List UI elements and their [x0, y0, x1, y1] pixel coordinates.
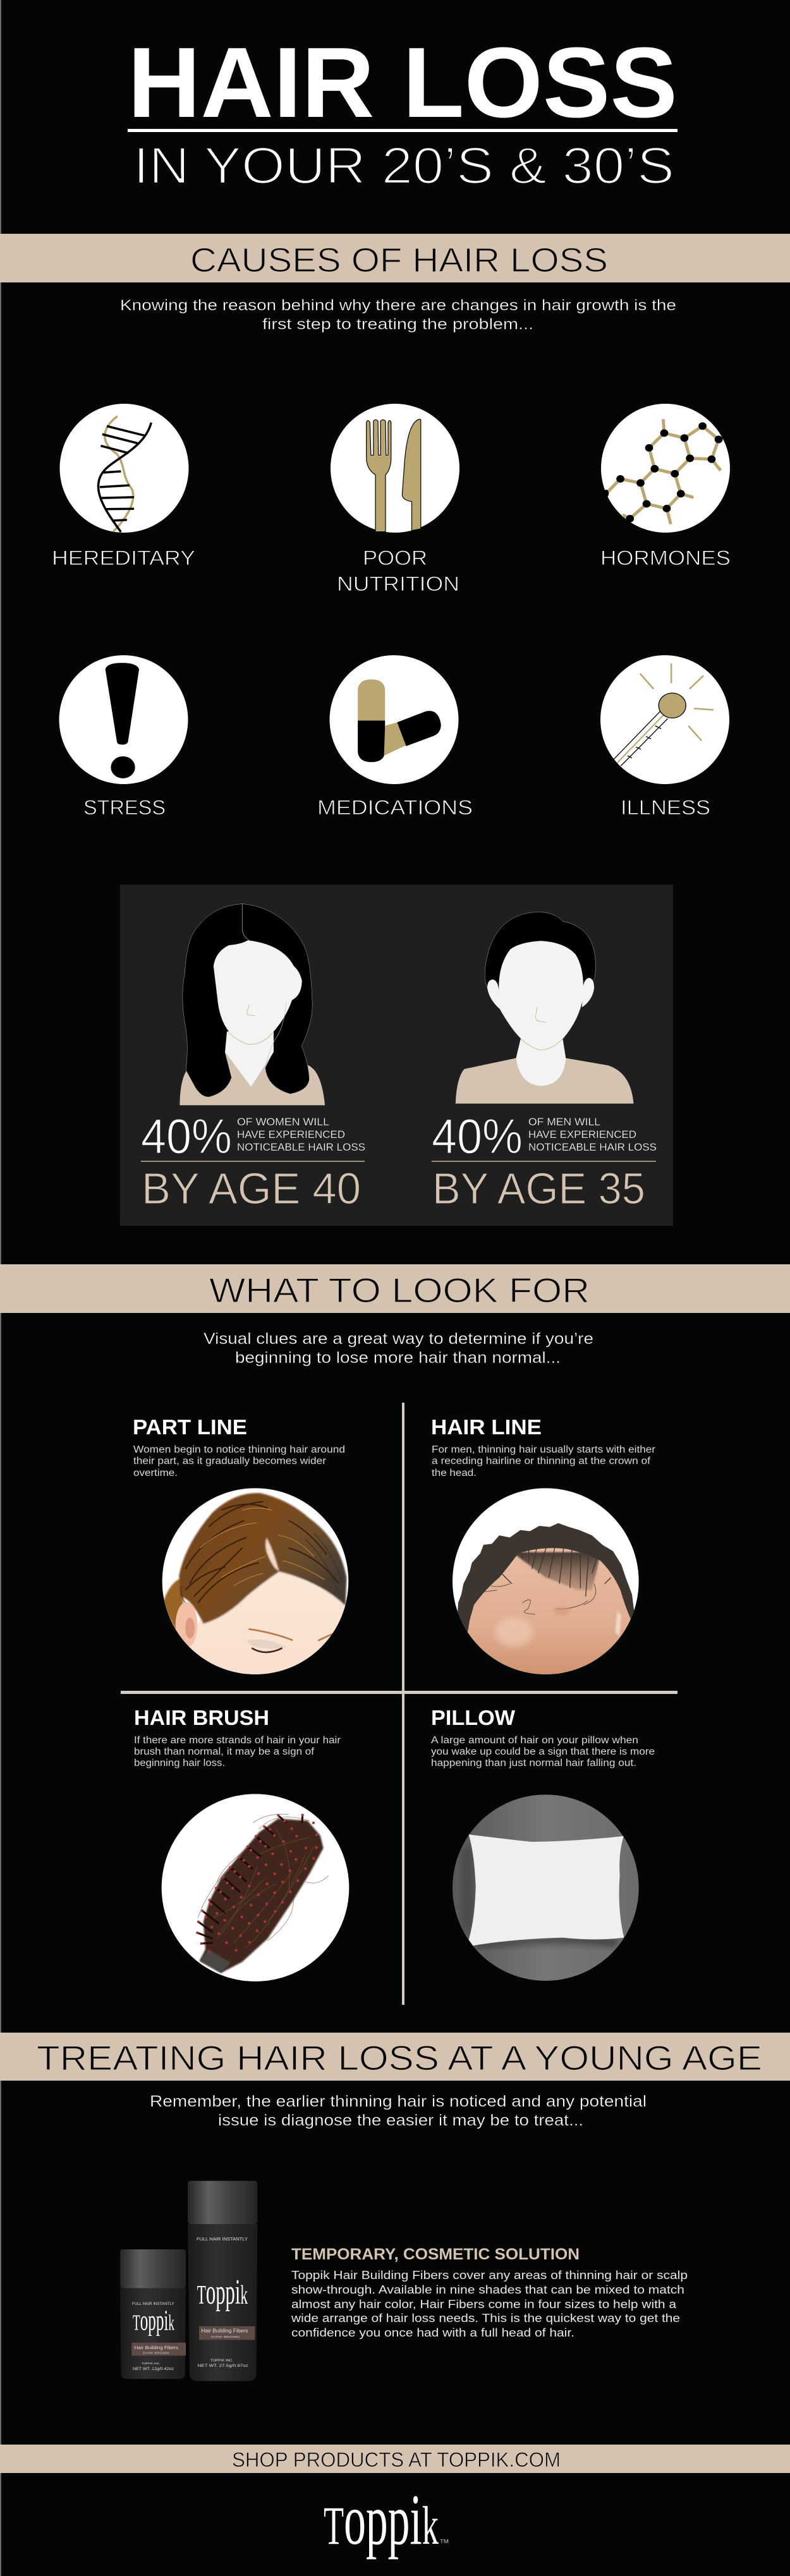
panel: hair brush: brush than normal, it may be a sign of — [134, 1746, 315, 1757]
panel: hair line: For men, thinning hair usually starts with either — [432, 1444, 655, 1455]
panel: pillow: A large amount of hair on your pillow when — [431, 1735, 638, 1746]
photo: woman's part line — [162, 1488, 352, 1679]
treating intro text: Remember, the earlier thinning hair is noticed and any potential — [150, 2093, 647, 2110]
title: HAIR LOSS — [128, 27, 678, 138]
panel: statistics by age — [120, 885, 673, 1226]
man illustration — [456, 912, 634, 1104]
photo: white pillow on grey — [453, 1794, 639, 1981]
logo: toppik: Toppik — [324, 2479, 439, 2560]
panel: hair line — [431, 1415, 655, 1683]
panel: hair line: HAIR LINE — [431, 1415, 542, 1439]
stat: men: OF MEN WILL — [528, 1116, 600, 1128]
large bottle — [188, 2181, 257, 2381]
label: hereditary: HEREDITARY — [52, 547, 195, 569]
photo: man's receding hairline — [453, 1488, 639, 1683]
label: medications: MEDICATIONS — [317, 796, 473, 819]
panel: hair line: the head. — [432, 1468, 477, 1478]
small bottle: DARK BROWN — [143, 2351, 169, 2354]
label: stress: STRESS — [83, 796, 166, 819]
callout: temporary cosmetic solution: wide arrange of hair loss needs. This is the quickest way to get the — [291, 2312, 680, 2325]
small bottle: NET WT. 12g/0.42oz — [133, 2367, 174, 2371]
small bottle — [120, 2249, 186, 2379]
callout: temporary cosmetic solution: confidence you once had with a full head of hair. — [291, 2326, 574, 2339]
icon: hereditary dna — [59, 404, 188, 533]
causes intro text: Knowing the reason behind why there are changes in hair growth is the — [120, 297, 676, 314]
title: IN YOUR 20’S & 30’S — [133, 137, 674, 195]
large bottle: Toppik — [197, 2273, 248, 2312]
panel: part line: their part, as it gradually becomes wider — [133, 1456, 326, 1466]
panel: hair brush — [134, 1706, 349, 1981]
panel: hair brush: If there are more strands of hair in your hair — [134, 1735, 341, 1746]
photo: hair brush with shed hair — [162, 1794, 349, 1981]
panel: hair brush: beginning hair loss. — [134, 1758, 225, 1769]
treating intro text: issue is diagnose the easier it may be to treat... — [218, 2112, 583, 2129]
what to look for intro text — [204, 1330, 593, 1367]
causes intro text: first step to treating the problem... — [262, 316, 533, 333]
icon: hormones molecule — [601, 404, 730, 533]
large bottle: FULL HAIR INSTANTLY — [197, 2236, 248, 2242]
section band: what to look for — [0, 1264, 790, 1313]
product: toppik bottles — [120, 2181, 257, 2381]
icon: illness thermometer — [600, 655, 729, 784]
label: poor nutrition: NUTRITION — [337, 572, 459, 595]
woman illustration — [180, 904, 325, 1105]
section band: what to look for: WHAT TO LOOK FOR — [209, 1271, 590, 1310]
panel: pillow: PILLOW — [431, 1706, 516, 1729]
large bottle: DARK BROWN — [211, 2335, 240, 2339]
panel: pillow: you wake up could be a sign that there is more — [431, 1746, 655, 1757]
causes intro text — [120, 297, 676, 333]
panel: hair brush: HAIR BRUSH — [134, 1706, 269, 1729]
section band: treating hair loss — [0, 2033, 790, 2081]
stat: women: 40% — [141, 1108, 232, 1164]
logo: toppik: TM — [440, 2539, 449, 2544]
stat: women: OF WOMEN WILL — [237, 1116, 329, 1128]
panel: part line: overtime. — [133, 1468, 178, 1478]
stat: women: NOTICEABLE HAIR LOSS — [237, 1141, 365, 1153]
callout: temporary cosmetic solution: almost any hair color, Hair Fibers come in four sizes to help with a — [291, 2298, 677, 2311]
callout: temporary cosmetic solution — [291, 2246, 688, 2339]
stat: men — [432, 1108, 657, 1213]
large bottle: TOPPIK INC. — [210, 2359, 234, 2362]
panel: part line: Women begin to notice thinning hair around — [133, 1444, 345, 1455]
callout: temporary cosmetic solution: Toppik Hair Building Fibers cover any areas of thinning hair or scalp — [291, 2269, 688, 2282]
section band: treating hair loss: TREATING HAIR LOSS AT A YOUNG AGE — [37, 2038, 762, 2077]
small bottle: TOPPIK INC. — [142, 2362, 161, 2366]
large bottle: NET WT. 27.5g/0.97oz — [198, 2364, 248, 2368]
title — [128, 27, 678, 195]
label: poor nutrition: POOR — [363, 547, 427, 569]
section band: causes of hair loss — [0, 234, 790, 282]
stat: women: HAVE EXPERIENCED — [237, 1128, 345, 1140]
panel: pillow: happening than just normal hair falling out. — [431, 1758, 636, 1769]
stat: men: BY AGE 35 — [432, 1164, 645, 1213]
footer band: shop products — [0, 2445, 790, 2473]
small bottle: Toppik — [133, 2304, 174, 2336]
footer band: shop products: SHOP PRODUCTS AT TOPPIK.COM — [232, 2448, 561, 2471]
what to look for intro text: beginning to lose more hair than normal... — [235, 1349, 561, 1367]
label: illness: ILLNESS — [621, 796, 710, 819]
callout: temporary cosmetic solution: show-through. Available in nine shades that can be mixed to match — [291, 2283, 684, 2296]
panel: part line — [133, 1415, 352, 1679]
icon: stress exclamation — [59, 655, 188, 784]
what to look for intro text: Visual clues are a great way to determine if you’re — [204, 1330, 593, 1348]
stat: men: 40% — [432, 1108, 523, 1164]
section band: causes of hair loss: CAUSES OF HAIR LOSS — [190, 241, 608, 279]
stat: men: NOTICEABLE HAIR LOSS — [528, 1141, 657, 1153]
label: poor nutrition — [337, 547, 459, 595]
small bottle: Hair Building Fibers — [135, 2345, 178, 2350]
panel: hair line: a receding hairline or thinning at the crown of — [432, 1456, 651, 1466]
panel: pillow — [431, 1706, 655, 1981]
label: hormones: HORMONES — [600, 547, 731, 569]
panel: part line: PART LINE — [133, 1415, 247, 1439]
small bottle: FULL HAIR INSTANTLY — [132, 2302, 174, 2306]
icon: medications pills — [330, 655, 459, 784]
large bottle: Hair Building Fibers — [201, 2328, 248, 2334]
stat: men: HAVE EXPERIENCED — [528, 1128, 636, 1140]
icon: poor nutrition fork and knife — [331, 404, 459, 533]
treating intro text — [150, 2093, 647, 2129]
stat: women: BY AGE 40 — [142, 1164, 361, 1213]
stat: women — [141, 1108, 365, 1213]
callout: temporary cosmetic solution: TEMPORARY, COSMETIC SOLUTION — [291, 2246, 580, 2263]
